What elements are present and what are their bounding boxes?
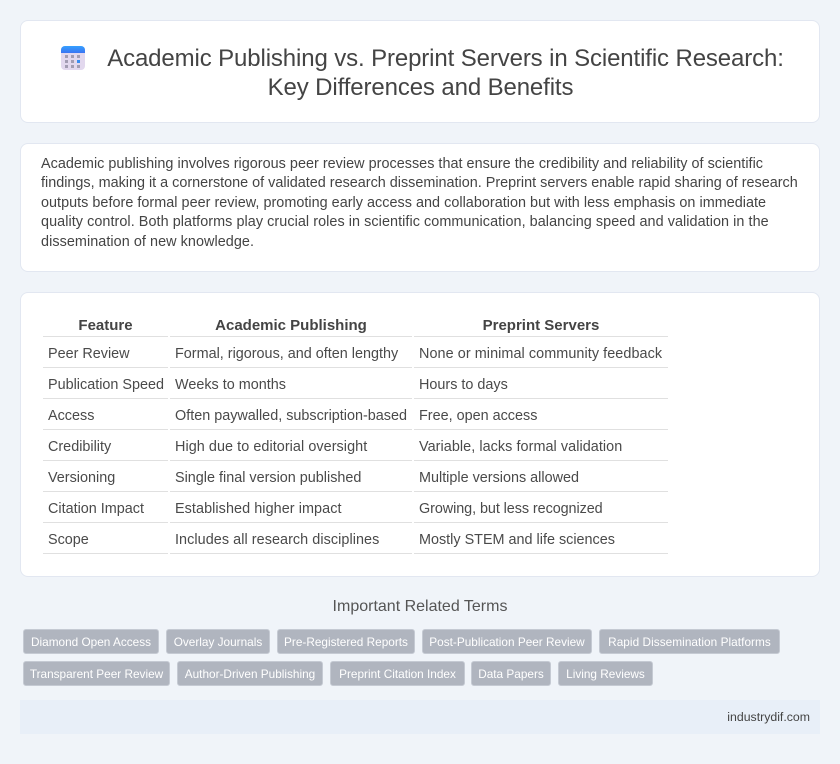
related term tags: Pre-Registered Reports bbox=[284, 635, 408, 649]
intro text: Academic publishing involves rigorous peer review processes that ensure the credibility and reliability of scientific bbox=[41, 156, 763, 172]
comparison table: Variable, lacks formal validation bbox=[419, 439, 622, 455]
related term tags: Preprint Citation Index bbox=[339, 667, 456, 681]
comparison table: Preprint Servers bbox=[483, 317, 599, 334]
comparison table: Established higher impact bbox=[175, 501, 342, 517]
intro panel bbox=[20, 143, 820, 272]
comparison table: Mostly STEM and life sciences bbox=[419, 532, 615, 548]
comparison table: Versioning bbox=[48, 470, 115, 486]
related term tags: Data Papers bbox=[478, 667, 544, 681]
comparison table: Often paywalled, subscription-based bbox=[175, 408, 407, 424]
comparison table: Citation Impact bbox=[48, 501, 144, 517]
related term tags: Diamond Open Access bbox=[31, 635, 151, 649]
comparison table: Free, open access bbox=[419, 408, 537, 424]
comparison table: Hours to days bbox=[419, 377, 508, 393]
related term tags: Overlay Journals bbox=[174, 635, 262, 649]
comparison table: None or minimal community feedback bbox=[419, 346, 662, 362]
comparison table: Single final version published bbox=[175, 470, 361, 486]
comparison table: High due to editorial oversight bbox=[175, 439, 367, 455]
related term tags: Rapid Dissemination Platforms bbox=[608, 635, 771, 649]
related terms heading: Important Related Terms bbox=[333, 598, 507, 615]
intro text bbox=[41, 156, 798, 250]
comparison table bbox=[43, 317, 668, 554]
header panel bbox=[20, 20, 820, 123]
comparison table: Growing, but less recognized bbox=[419, 501, 603, 517]
related term tags: Post-Publication Peer Review bbox=[429, 635, 585, 649]
comparison table: Multiple versions allowed bbox=[419, 470, 579, 486]
icon: calendar bbox=[61, 46, 85, 70]
related term tags: Living Reviews bbox=[566, 667, 645, 681]
footer bar bbox=[20, 700, 820, 734]
footer text: industrydif.com bbox=[727, 710, 810, 724]
comparison table: Access bbox=[48, 408, 94, 424]
comparison table: Formal, rigorous, and often lengthy bbox=[175, 346, 398, 362]
table panel bbox=[20, 292, 820, 577]
comparison table: Publication Speed bbox=[48, 377, 164, 393]
related term tags: Transparent Peer Review bbox=[30, 667, 163, 681]
comparison table: Credibility bbox=[48, 439, 111, 455]
intro text: dissemination of new knowledge. bbox=[41, 234, 254, 250]
title bbox=[107, 45, 784, 101]
intro text: quality control. Both platforms play crucial roles in scientific communication, balancing speed and validation in the bbox=[41, 214, 769, 230]
related term tags bbox=[23, 629, 780, 686]
comparison table: Feature bbox=[78, 317, 133, 334]
intro text: findings, making it a cornerstone of validated research dissemination. Preprint servers enable rapid sharing of research bbox=[41, 175, 798, 191]
comparison table: Includes all research disciplines bbox=[175, 532, 379, 548]
comparison table: Weeks to months bbox=[175, 377, 286, 393]
comparison table: Peer Review bbox=[48, 346, 130, 362]
comparison table: Scope bbox=[48, 532, 89, 548]
title: Academic Publishing vs. Preprint Servers in Scientific Research: bbox=[107, 45, 784, 72]
title: Key Differences and Benefits bbox=[268, 74, 573, 101]
related term tags: Author-Driven Publishing bbox=[185, 667, 315, 681]
intro text: outputs before formal peer review, promoting early access and collaboration but with less emphasis on immediate bbox=[41, 195, 766, 211]
comparison table: Academic Publishing bbox=[215, 317, 367, 334]
